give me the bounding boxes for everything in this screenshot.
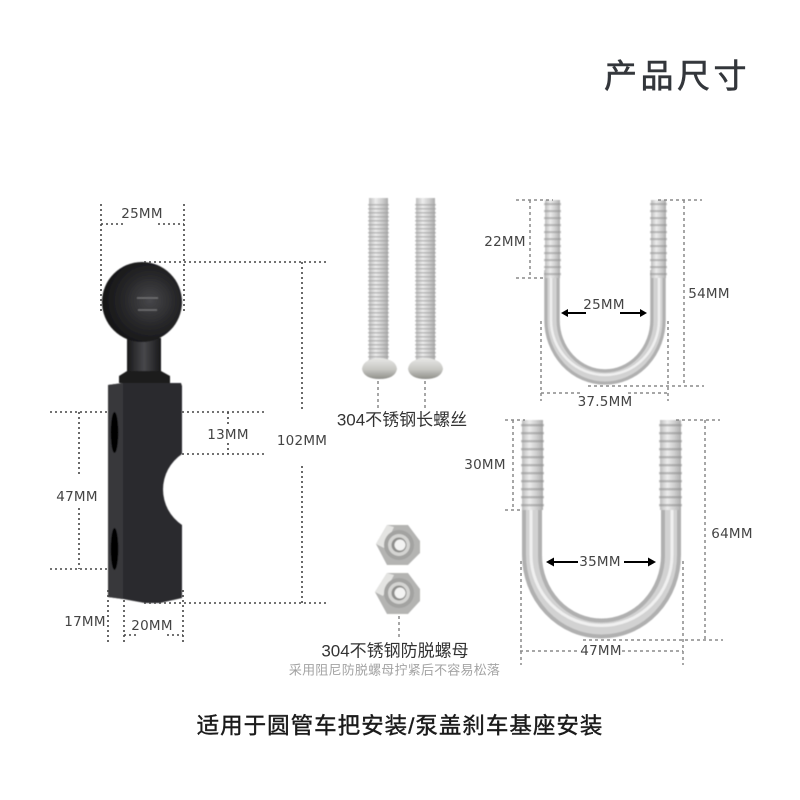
note: nuts: 采用阻尼防脱螺母拧紧后不容易松落 (289, 662, 500, 678)
dimension: 54MM (588, 200, 730, 386)
panel: nuts (289, 525, 500, 678)
icon: nut bottom (375, 573, 420, 614)
icon: screw left (362, 198, 397, 379)
label: long screws: 304不锈钢长螺丝 (337, 410, 467, 430)
dimension: 64MM (583, 420, 753, 640)
dimension: 17MM (64, 590, 124, 645)
dimension: 30MM: 30MM (464, 457, 506, 473)
arrow: 35MM inner width: 35MM (579, 554, 621, 570)
panel: small U-bolt (484, 200, 730, 410)
icon: ball mount arm (102, 262, 182, 603)
dimension: 37.5MM: 37.5MM (578, 394, 632, 410)
dimension: 54MM: 54MM (688, 286, 730, 302)
label: nuts: 304不锈钢防脱螺母 (321, 642, 469, 660)
icon: small U-bolt (544, 200, 667, 377)
dimension: 20MM (124, 590, 183, 645)
dimension: 47MM (520, 561, 683, 665)
dimension: 47MM (50, 412, 110, 569)
panel: large U-bolt (464, 420, 753, 665)
dimension: 13MM: 13MM (207, 427, 249, 443)
dimension: 22MM: 22MM (484, 234, 526, 250)
title: 产品尺寸 (604, 58, 750, 94)
dimension: 17MM: 17MM (64, 614, 106, 630)
arrow: 25MM inner width (561, 297, 647, 317)
panel: long screws (337, 198, 467, 430)
icon: screw right (408, 198, 443, 379)
dimension: 30MM (464, 420, 525, 510)
dimension: 37.5MM (541, 321, 668, 410)
dimension: 13MM (182, 412, 265, 454)
dimension: 47MM: 47MM (56, 489, 98, 505)
dimension: 22MM (484, 200, 553, 278)
panel: ball mount (50, 204, 327, 645)
arrow: 25MM inner width: 25MM (583, 297, 625, 313)
icon: large U-bolt (521, 420, 682, 629)
dimension: 47MM: 47MM (580, 643, 622, 659)
dimension: 64MM: 64MM (711, 526, 753, 542)
arrow: 35MM inner width (546, 554, 656, 570)
dimension: 25MM (101, 204, 184, 313)
dimension: 20MM: 20MM (131, 618, 173, 634)
dimension: 102MM (144, 262, 327, 603)
icon: nut top (376, 525, 420, 565)
dimension: 102MM: 102MM (277, 433, 327, 449)
caption: 适用于圆管车把安装/泵盖刹车基座安装 (197, 714, 603, 738)
dimension: 25MM: 25MM (121, 206, 163, 222)
